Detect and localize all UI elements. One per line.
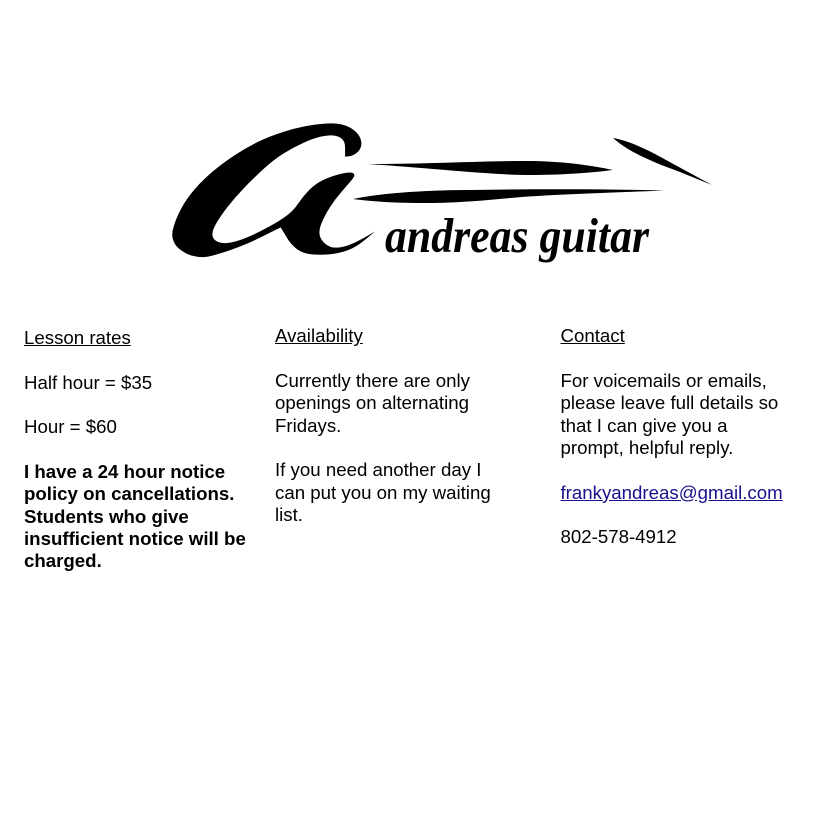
column: contact: 802-578-4912 [560, 526, 677, 547]
column: contact: that I can give you a [560, 415, 727, 436]
column: availability: can put you on my waiting [275, 482, 491, 503]
column: availability: Fridays. [275, 415, 341, 436]
column: availability: Currently there are only [275, 370, 470, 391]
logo wordmark: andreas guitar [385, 209, 649, 263]
column: availability: If you need another day I [275, 459, 481, 480]
logo stroke: upper string [368, 161, 613, 175]
column: lesson rates: Students who give [24, 506, 189, 527]
logo: andreas guitar [172, 123, 712, 263]
column: contact: Contact [560, 325, 625, 346]
column: lesson rates: Half hour = $35 [24, 372, 152, 393]
column: contact: prompt, helpful reply. [560, 437, 733, 458]
logo letter A [172, 123, 375, 257]
column: availability [275, 325, 491, 525]
column: contact [560, 325, 783, 547]
logo stroke: lower string [353, 189, 664, 203]
column: lesson rates: Lesson rates [24, 327, 131, 348]
column: availability: list. [275, 504, 303, 525]
column: contact: For voicemails or emails, [560, 370, 767, 391]
column: lesson rates: I have a 24 hour notice [24, 461, 225, 482]
column: lesson rates: charged. [24, 550, 102, 571]
column: contact: please leave full details so [560, 392, 778, 413]
column: contact: frankyandreas@gmail.com [560, 482, 783, 503]
column: lesson rates: insufficient notice will be [24, 528, 246, 549]
column: lesson rates: policy on cancellations. [24, 483, 234, 504]
logo stroke: diagonal slash [613, 138, 712, 185]
column: lesson rates [24, 327, 246, 571]
column: lesson rates: Hour = $60 [24, 416, 117, 437]
column: availability: openings on alternating [275, 392, 469, 413]
column: availability: Availability [275, 325, 363, 346]
